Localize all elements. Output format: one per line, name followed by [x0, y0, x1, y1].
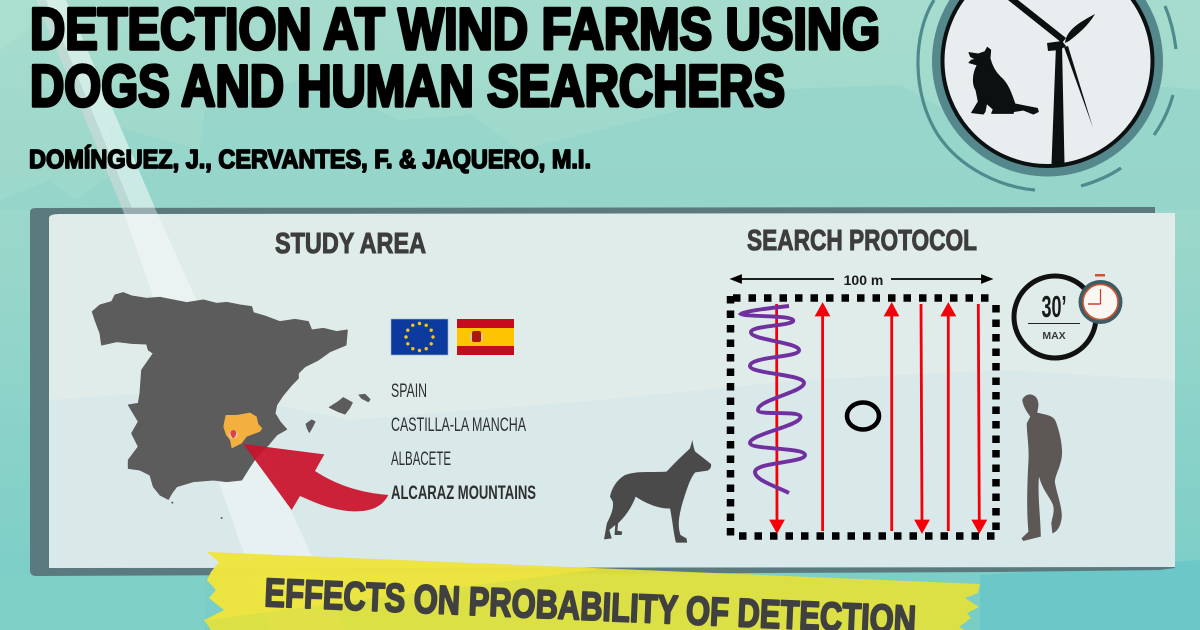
- flag: Spain: [457, 319, 514, 355]
- icon: wind turbine: [1008, 0, 1095, 164]
- heading: study area: STUDY AREA: [275, 228, 426, 260]
- authors: DOMÍNGUEZ, J., CERVANTES, F. & JAQUERO, M.I.: [29, 144, 591, 174]
- diagonal light beam above panel: [36, 0, 155, 208]
- map of Spain: [92, 293, 388, 519]
- dog search path: [741, 306, 805, 493]
- panel shading: [49, 370, 1175, 568]
- width dimension: 100 m: 100 m: [844, 272, 883, 288]
- flag: European Union: [391, 319, 448, 355]
- location list: CASTILLA-LA MANCHA: [391, 414, 526, 436]
- yellow banner: [204, 552, 980, 630]
- location list: [391, 380, 536, 504]
- location list: ALBACETE: [391, 448, 451, 470]
- title: DOGS AND HUMAN SEARCHERS: [30, 54, 785, 119]
- search plot boundary: [730, 296, 996, 536]
- arrow: pointing to Albacete: [243, 444, 388, 511]
- time limit: 30 minutes max: MAX: [1042, 330, 1066, 342]
- diagonal light beam on panel: [122, 208, 345, 630]
- time limit: 30 minutes max: 30’: [1042, 289, 1066, 324]
- search transect arrows: [772, 304, 985, 531]
- icon: human searcher: [1021, 394, 1062, 541]
- time limit: 30 minutes max: [1014, 274, 1122, 358]
- carcass marker ring: [847, 402, 879, 430]
- width dimension: 100 m: [732, 272, 991, 288]
- heading: search protocol: SEARCH PROTOCOL: [747, 225, 977, 257]
- main light panel: [49, 213, 1175, 568]
- icon: location pin: [229, 430, 238, 439]
- title: [30, 0, 880, 119]
- icon: standing dog: [604, 440, 711, 543]
- location list: ALCARAZ MOUNTAINS: [391, 482, 536, 504]
- icon: seated dog: [969, 47, 1038, 114]
- location list: SPAIN: [391, 380, 427, 402]
- logo badge: dog and wind turbine: [918, 0, 1176, 190]
- icon: stopwatch: [1078, 274, 1122, 324]
- panel backing: [30, 207, 1175, 576]
- region: Albacete: [223, 413, 262, 448]
